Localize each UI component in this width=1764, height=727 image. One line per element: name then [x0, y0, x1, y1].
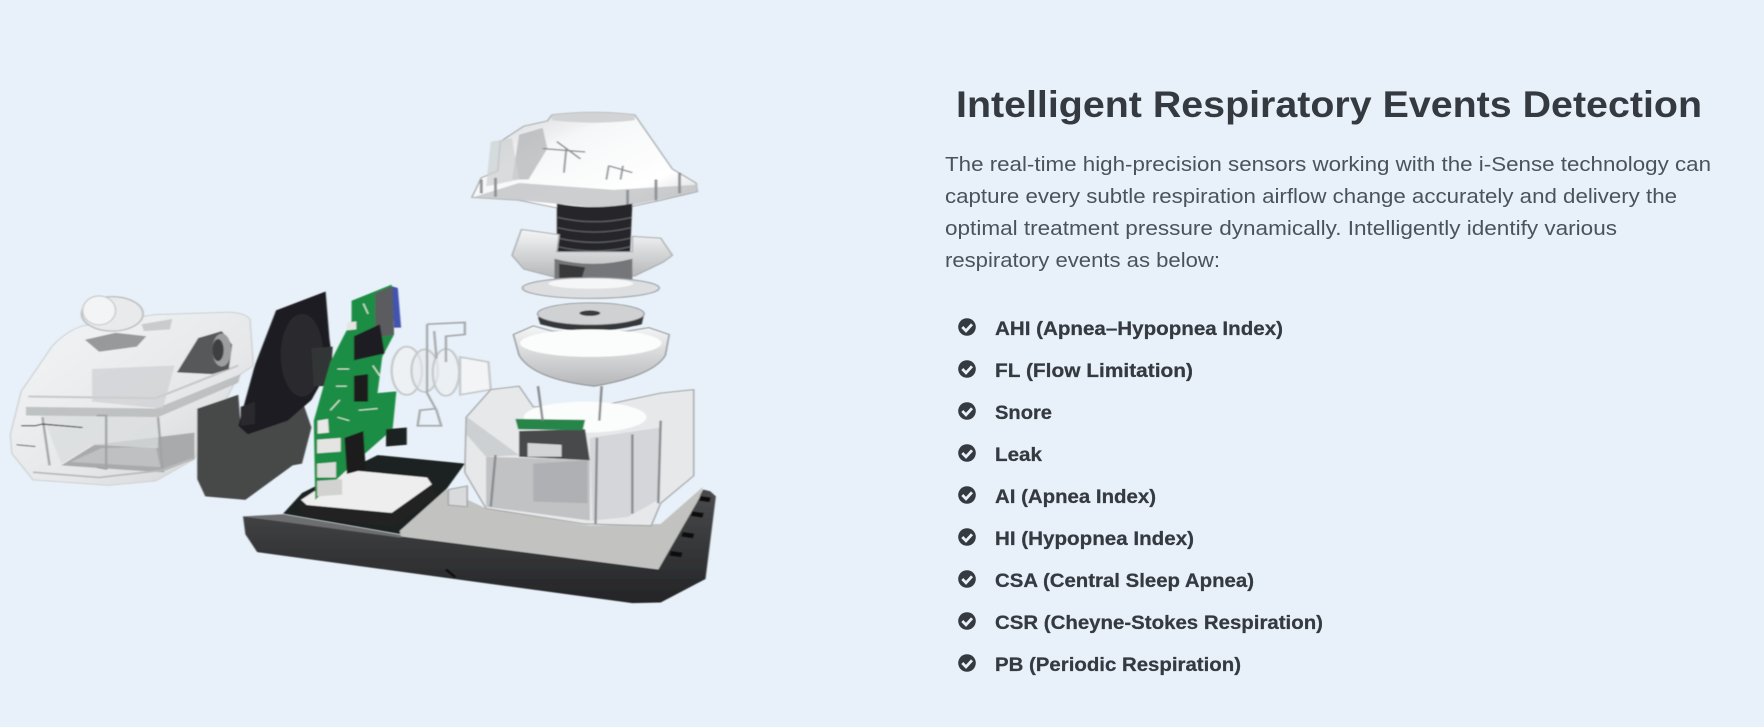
heading: Intelligent Respiratory Events Detection [956, 84, 1702, 125]
intro paragraph: respiratory events as below: [945, 249, 1220, 272]
list item: Snore [958, 402, 1052, 424]
intro paragraph: optimal treatment pressure dynamically. Intelligently identify various [945, 217, 1617, 240]
list item: Leak: Leak [995, 445, 1042, 466]
green circuit board [314, 285, 407, 500]
foam filter [296, 470, 437, 527]
left transparent housing [10, 296, 253, 485]
base tray [243, 455, 716, 603]
illustration: exploded view of device [10, 112, 716, 603]
intro paragraph [945, 153, 1711, 272]
list item: FL: FL (Flow Limitation) [995, 361, 1193, 382]
clear lower chamber [448, 386, 694, 526]
transparent dome cap [472, 112, 697, 211]
black bellows motor [557, 204, 632, 260]
list item: HI: HI (Hypopnea Index) [995, 529, 1194, 550]
intro paragraph: capture every subtle respiration airflow change accurately and delivery the [945, 185, 1677, 208]
black blower housing [197, 291, 333, 500]
light gray plate [400, 487, 703, 569]
mid clear bowl and motor [512, 229, 672, 298]
clear bowl [513, 326, 669, 386]
list item: AI: AI (Apnea Index) [995, 487, 1156, 508]
clear tube connector [392, 322, 491, 426]
list item: Snore: Snore [995, 403, 1052, 424]
list item: CSA: CSA (Central Sleep Apnea) [995, 571, 1254, 592]
list item: AHI: AHI (Apnea–Hypopnea Index) [995, 319, 1283, 340]
list item: Leak [958, 444, 1042, 466]
list item: CSR: CSR (Cheyne-Stokes Respiration) [995, 613, 1323, 634]
list item: PB: PB (Periodic Respiration) [995, 655, 1241, 676]
intro paragraph: The real-time high-precision sensors working with the i-Sense technology can [945, 153, 1711, 176]
impeller disc [537, 303, 644, 331]
list of respiratory events [958, 318, 1323, 676]
